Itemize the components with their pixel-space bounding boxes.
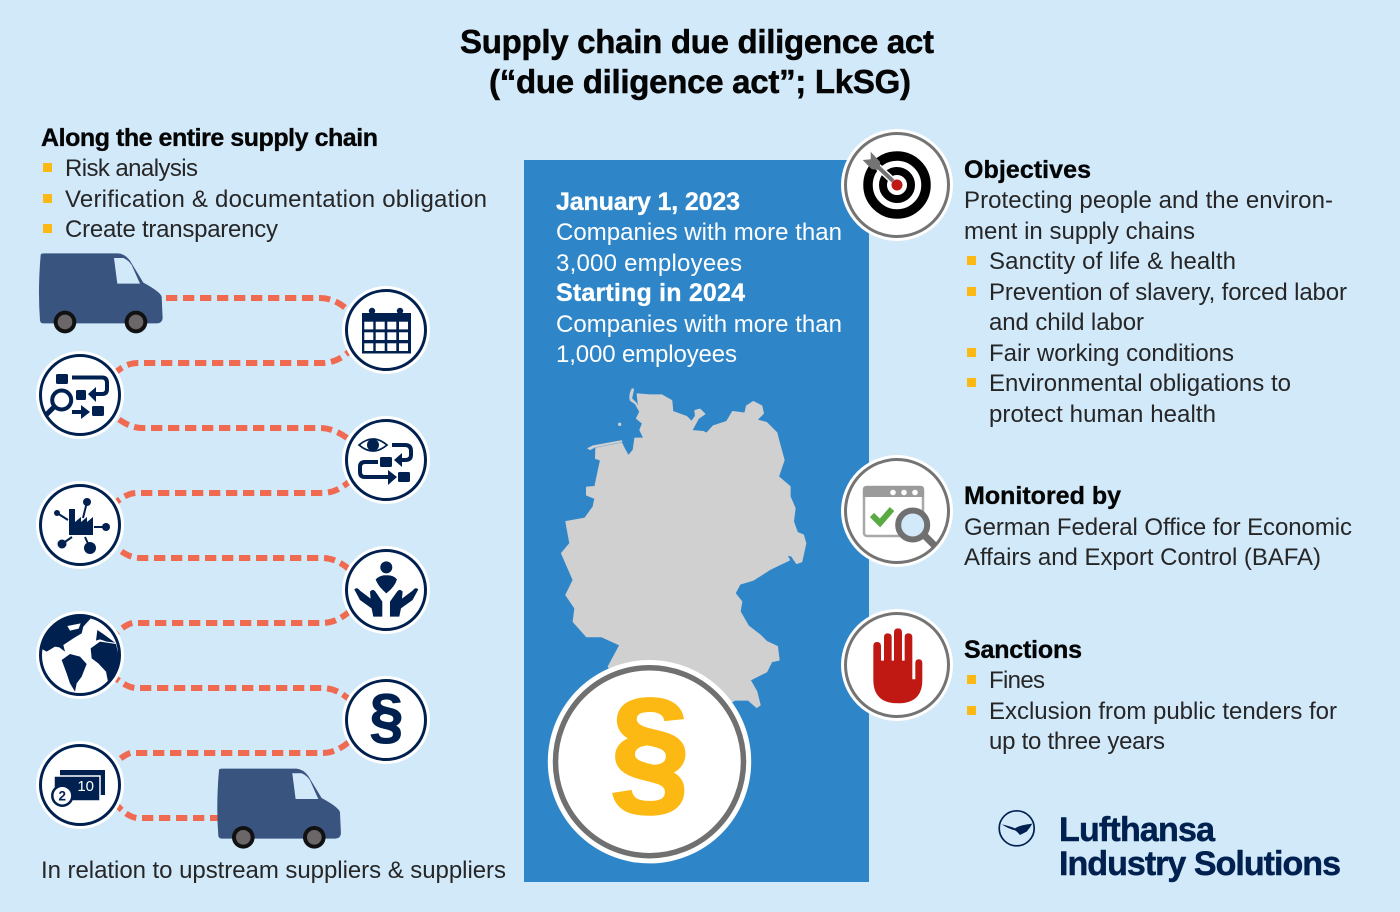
icon: delivery van bottom [217, 769, 341, 849]
icon: target [841, 129, 953, 241]
title [460, 23, 934, 100]
text block: sanctions [964, 636, 1337, 755]
text block: objectives: Objectives [964, 156, 1091, 184]
text block: objectives: Protecting people and the environ- [964, 187, 1333, 214]
icon: eye and process [342, 416, 430, 504]
logo: Lufthansa Industry Solutions [999, 811, 1341, 883]
icon: delivery van top [39, 253, 163, 333]
text block: objectives: Sanctity of life & health [989, 248, 1236, 275]
panel: timeline and Germany map [524, 160, 869, 882]
text block: timeline: 3,000 employees [556, 250, 742, 277]
paragraph seal: § [610, 670, 690, 829]
icon: factory network [36, 481, 124, 569]
icon: stop hand [841, 609, 953, 721]
supply chain dashed route [112, 298, 352, 818]
text block: objectives: Environmental obligations to [989, 370, 1291, 397]
text block: along the entire supply chain: Risk analysis [65, 155, 198, 182]
text block: objectives [964, 156, 1347, 428]
text block: monitored by: Affairs and Export Control (BAFA) [964, 544, 1321, 571]
text block: along the entire supply chain: Along the entire supply chain [41, 124, 378, 152]
bottom caption: In relation to upstream suppliers & suppliers [41, 857, 506, 884]
logo: crane emblem [999, 811, 1034, 846]
map of Germany [562, 388, 806, 717]
text block: along the entire supply chain [41, 124, 487, 243]
icon: fines money [36, 741, 124, 829]
logo: Lufthansa Industry Solutions: Industry Solutions [1059, 845, 1341, 883]
text block: timeline: Companies with more than [556, 311, 842, 338]
text block: timeline: 1,000 employees [556, 341, 737, 368]
text block: sanctions: Sanctions [964, 636, 1082, 664]
text block: along the entire supply chain: Verification & documentation obligation [65, 186, 487, 213]
text block: objectives: protect human health [989, 401, 1216, 428]
icon: monitoring window and magnifier [841, 455, 953, 567]
text block: monitored by [964, 482, 1352, 571]
title: Supply chain due diligence act [460, 23, 934, 60]
text block: monitored by: German Federal Office for Economic [964, 514, 1352, 541]
text block: along the entire supply chain: Create transparency [65, 216, 278, 243]
text block: sanctions: Fines [989, 667, 1045, 694]
icon: fines money: 2 [59, 788, 66, 804]
text block: timeline: Starting in 2024 [556, 279, 745, 307]
icon: paragraph sign small: § [370, 681, 403, 749]
icon: globe [36, 611, 124, 699]
text block: objectives: and child labor [989, 309, 1144, 336]
text block: sanctions: Exclusion from public tenders for [989, 698, 1337, 725]
logo: Lufthansa Industry Solutions: Lufthansa [1059, 811, 1216, 849]
icon: hands protecting person [342, 546, 430, 634]
icon: process analysis magnifier [36, 351, 124, 439]
text block: sanctions: up to three years [989, 728, 1165, 755]
text block: objectives: Fair working conditions [989, 340, 1234, 367]
title: (“due diligence act”; LkSG) [489, 63, 911, 100]
text block: timeline: January 1, 2023 [556, 188, 740, 216]
text block: timeline: Companies with more than [556, 219, 842, 246]
text block: objectives: Prevention of slavery, forced labor [989, 279, 1347, 306]
paragraph seal [548, 660, 751, 863]
text block: monitored by: Monitored by [964, 482, 1121, 510]
text block: timeline [556, 188, 842, 368]
icon: paragraph sign small [342, 676, 430, 764]
icon: calendar [342, 286, 430, 374]
icon: fines money: 10 [77, 778, 94, 795]
text block: objectives: ment in supply chains [964, 218, 1195, 245]
